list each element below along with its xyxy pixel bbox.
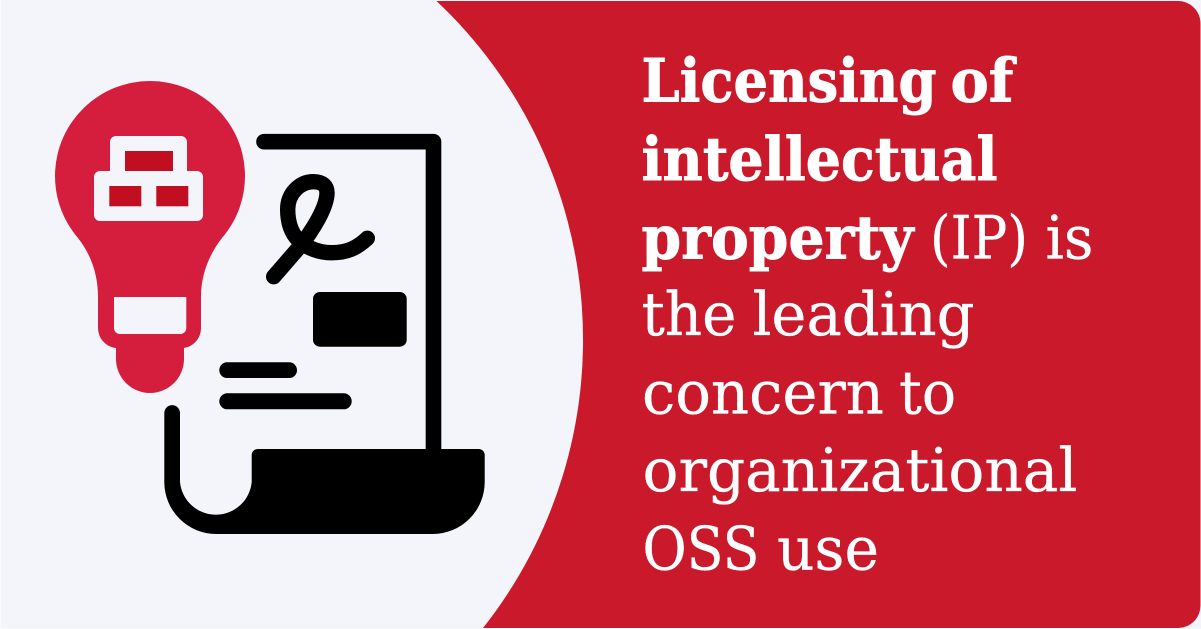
right brick — [156, 186, 188, 206]
headline text: intellectual — [642, 125, 998, 195]
headline text — [642, 47, 1094, 584]
text line long — [219, 393, 352, 409]
scroll bottom curl — [164, 405, 485, 534]
headline text: concern — [642, 358, 884, 428]
bulb base window — [114, 297, 186, 334]
bulb body — [55, 81, 245, 393]
top brick — [125, 151, 173, 171]
signature — [274, 182, 367, 277]
headline text: the — [642, 280, 736, 350]
text line short — [219, 362, 297, 378]
headline text: to — [899, 358, 956, 428]
headline text: use — [777, 514, 879, 584]
headline text: organizational — [642, 436, 1078, 506]
headline text: (IP) — [930, 203, 1028, 273]
left brick — [109, 186, 141, 206]
headline text: Licensing — [642, 47, 936, 117]
headline text: is — [1046, 203, 1094, 273]
icon: light bulb with bricks — [55, 81, 245, 393]
bricks outline — [94, 136, 203, 221]
scroll page outline — [264, 142, 434, 455]
headline text: leading — [752, 280, 974, 350]
headline text: OSS — [642, 514, 760, 584]
panel: red text panel — [436, 1, 1200, 628]
headline text: of — [950, 47, 1017, 117]
seal block — [313, 292, 407, 347]
icon: contract scroll with signature — [164, 142, 485, 534]
headline text: property — [642, 203, 916, 273]
